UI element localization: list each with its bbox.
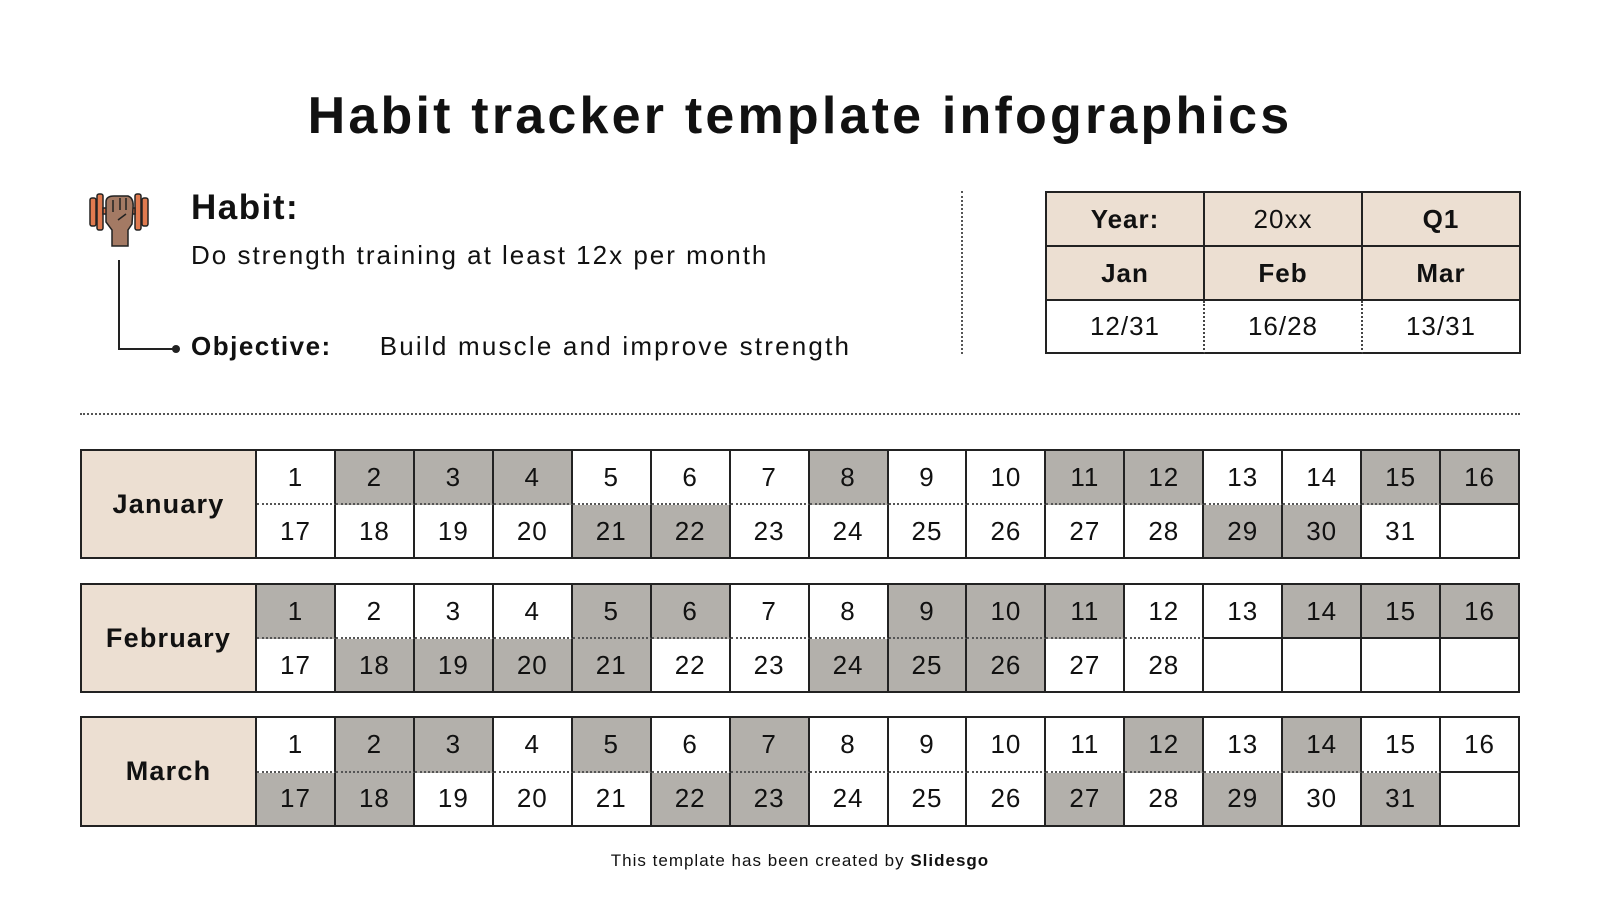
table: March: 21 bbox=[596, 783, 627, 813]
table: January: 6 bbox=[682, 462, 698, 492]
table: February: 8 bbox=[840, 596, 856, 626]
table: January: 4 bbox=[525, 462, 540, 492]
table: March: 17 bbox=[280, 783, 311, 813]
table: March: 24 bbox=[833, 783, 863, 813]
table: March: 7 bbox=[761, 729, 777, 759]
table: March: 27 bbox=[1069, 783, 1100, 813]
table: March: 9 bbox=[919, 729, 935, 759]
table: January: 5 bbox=[603, 462, 619, 492]
summary table: 12/31 bbox=[1090, 311, 1160, 341]
table: February: 25 bbox=[912, 650, 942, 680]
footer: This template has been created by Slidesgo bbox=[611, 851, 989, 870]
table: January: 7 bbox=[761, 462, 777, 492]
summary table: Mar bbox=[1416, 258, 1466, 288]
table: January: 14 bbox=[1306, 462, 1337, 492]
table: March: 25 bbox=[912, 783, 942, 813]
table: January: 27 bbox=[1069, 516, 1100, 546]
table: February: 28 bbox=[1148, 650, 1179, 680]
table: January: 15 bbox=[1385, 462, 1416, 492]
table: March: 14 bbox=[1306, 729, 1337, 759]
habit description: Do strength training at least 12x per month bbox=[191, 240, 768, 270]
table: March: 23 bbox=[754, 783, 785, 813]
table: January: 17 bbox=[280, 516, 311, 546]
summary table: Feb bbox=[1258, 258, 1308, 288]
table: February: February bbox=[106, 622, 231, 652]
table: January: 28 bbox=[1148, 516, 1179, 546]
table: January: 3 bbox=[446, 462, 461, 492]
table: March: 4 bbox=[525, 729, 540, 759]
table: February: 16 bbox=[1464, 596, 1495, 626]
table: February: 27 bbox=[1069, 650, 1100, 680]
table: February: 4 bbox=[525, 596, 540, 626]
table: January: 31 bbox=[1385, 516, 1416, 546]
table: March: 8 bbox=[840, 729, 856, 759]
summary table: 20xx bbox=[1254, 204, 1312, 234]
icon: dumbbell fist bbox=[89, 193, 149, 247]
summary table: 16/28 bbox=[1248, 311, 1318, 341]
connector line bbox=[118, 260, 174, 350]
table: February: 12 bbox=[1148, 596, 1179, 626]
table: January: 10 bbox=[990, 462, 1021, 492]
table: March: 12 bbox=[1148, 729, 1179, 759]
table: February: 17 bbox=[280, 650, 311, 680]
table: March: March bbox=[126, 756, 211, 786]
table: January: January bbox=[113, 488, 224, 518]
table: February: 3 bbox=[446, 596, 461, 626]
table: February: 1 bbox=[288, 596, 303, 626]
table: March: 30 bbox=[1306, 783, 1337, 813]
table: February: 20 bbox=[517, 650, 548, 680]
table: February: 7 bbox=[761, 596, 777, 626]
table: March: 26 bbox=[990, 783, 1021, 813]
table: January: 25 bbox=[912, 516, 942, 546]
table: January: 12 bbox=[1148, 462, 1179, 492]
table: February: 6 bbox=[682, 596, 698, 626]
table: February: 19 bbox=[438, 650, 469, 680]
title: Habit tracker template infographics bbox=[308, 87, 1292, 145]
horizontal dotted divider bbox=[80, 413, 1520, 415]
summary table: Q1 bbox=[1423, 204, 1459, 234]
table: March: 19 bbox=[438, 783, 469, 813]
table: February: 2 bbox=[367, 596, 382, 626]
table: February: 24 bbox=[833, 650, 863, 680]
habit heading: Habit: bbox=[191, 188, 299, 227]
table: March: 6 bbox=[682, 729, 698, 759]
table: March: 18 bbox=[359, 783, 390, 813]
table: February bbox=[80, 583, 1520, 693]
table: February: 18 bbox=[359, 650, 390, 680]
table: March: 22 bbox=[675, 783, 706, 813]
table: March: 10 bbox=[990, 729, 1021, 759]
table: March: 31 bbox=[1385, 783, 1416, 813]
table: March: 11 bbox=[1070, 729, 1099, 759]
table: January: 29 bbox=[1227, 516, 1258, 546]
table: February: 11 bbox=[1070, 596, 1099, 626]
table: March: 13 bbox=[1227, 729, 1258, 759]
table: January: 11 bbox=[1070, 462, 1099, 492]
table: January: 2 bbox=[367, 462, 382, 492]
table: February: 22 bbox=[675, 650, 706, 680]
table: January bbox=[80, 449, 1520, 559]
table: January: 16 bbox=[1464, 462, 1495, 492]
vertical dotted divider bbox=[961, 191, 963, 354]
table: March: 16 bbox=[1464, 729, 1495, 759]
table: March: 29 bbox=[1227, 783, 1258, 813]
table: February: 15 bbox=[1385, 596, 1416, 626]
table: March bbox=[80, 716, 1520, 827]
table: January: 21 bbox=[596, 516, 627, 546]
table: January: 24 bbox=[833, 516, 863, 546]
table: January: 1 bbox=[288, 462, 303, 492]
table: February: 21 bbox=[596, 650, 627, 680]
table: January: 19 bbox=[438, 516, 469, 546]
table: January: 18 bbox=[359, 516, 390, 546]
table: March: 15 bbox=[1385, 729, 1416, 759]
objective: Objective: Build muscle and improve strength bbox=[191, 331, 851, 361]
table: January: 30 bbox=[1306, 516, 1337, 546]
table: January: 8 bbox=[840, 462, 856, 492]
table: March: 20 bbox=[517, 783, 548, 813]
table: February: 26 bbox=[990, 650, 1021, 680]
table: January: 20 bbox=[517, 516, 548, 546]
table: February: 13 bbox=[1227, 596, 1258, 626]
table: February: 5 bbox=[603, 596, 619, 626]
summary table bbox=[1045, 191, 1521, 354]
table: March: 1 bbox=[288, 729, 303, 759]
table: March: 2 bbox=[367, 729, 382, 759]
table: January: 23 bbox=[754, 516, 785, 546]
table: January: 22 bbox=[675, 516, 706, 546]
table: January: 13 bbox=[1227, 462, 1258, 492]
table: February: 10 bbox=[990, 596, 1021, 626]
table: March: 28 bbox=[1148, 783, 1179, 813]
table: February: 14 bbox=[1306, 596, 1337, 626]
table: March: 5 bbox=[603, 729, 619, 759]
summary table: Jan bbox=[1101, 258, 1149, 288]
table: February: 9 bbox=[919, 596, 935, 626]
table: January: 26 bbox=[990, 516, 1021, 546]
table: January: 9 bbox=[919, 462, 935, 492]
summary table: 13/31 bbox=[1406, 311, 1476, 341]
table: February: 23 bbox=[754, 650, 785, 680]
table: March: 3 bbox=[446, 729, 461, 759]
summary table: Year: bbox=[1091, 204, 1159, 234]
